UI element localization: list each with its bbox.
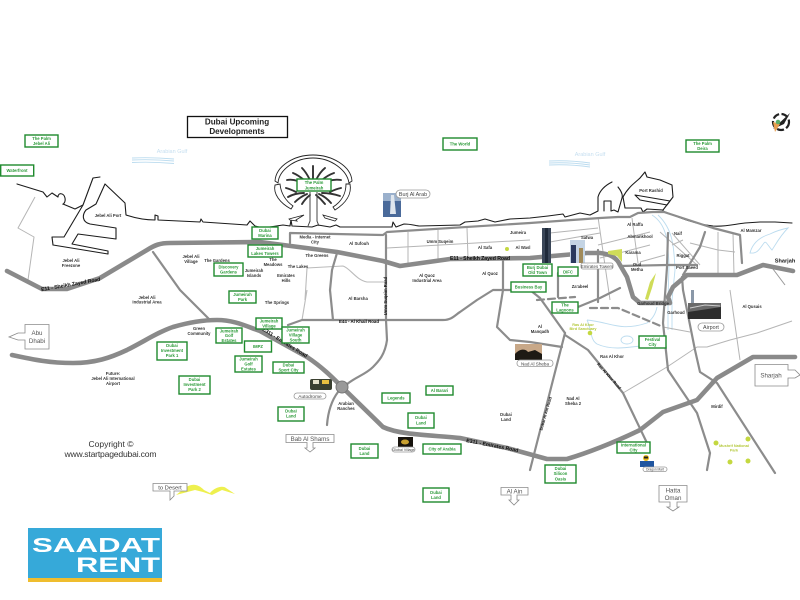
water: creek and lagoons (587, 215, 788, 348)
box: The Palm Deira: Deira (697, 146, 708, 151)
destination: Bab Al Shams: Bab Al Shams (291, 436, 329, 443)
box: Legends (382, 393, 410, 403)
area labels: Port Rashid (639, 188, 663, 193)
area labels: Industrial Area (132, 300, 162, 304)
box: Dubai Land far south: Land (431, 495, 441, 500)
Arabian Gulf water markers: Arabian Gulf (575, 152, 606, 158)
area labels: City (311, 240, 320, 244)
box: The Palm Jumeirah: Jumeirah (305, 186, 324, 190)
area labels: Garhoud (667, 310, 685, 315)
area labels: Sheba 2 (565, 401, 582, 406)
box: Dubai Investment Park 1: Park 1 (166, 353, 179, 358)
area labels (62, 188, 796, 422)
area labels: Garhoud Bridge (637, 301, 670, 306)
box: The Palm Jebel Ali (25, 135, 58, 147)
area labels: Nad Al (566, 396, 580, 401)
parks: green markers: Bird Sanctuary (569, 327, 597, 331)
box: Jumeirah Village South (282, 327, 309, 343)
box: International City: City (630, 448, 638, 452)
area labels: Riggat (676, 253, 690, 258)
area labels: Sharjah (775, 258, 796, 264)
destination: to Desert with dunes: to Desert (158, 486, 182, 492)
area labels: Hills (282, 278, 291, 283)
box: Dubai Land centre: Land (416, 420, 426, 426)
box: The Lagoons (552, 302, 578, 313)
box: Dubai Silicon Oasis: Dubai (555, 466, 566, 471)
box: Dubai Land west: Dubai (285, 408, 297, 414)
box: Dubai Investment Park 2 (179, 376, 210, 394)
box: The Lagoons: Lagoons (556, 308, 574, 312)
Arabian Gulf water markers (132, 149, 606, 167)
area labels: Jebel Ali (62, 258, 80, 263)
box: International City: International (621, 442, 646, 448)
road names: E311 - Emirates Road (261, 327, 308, 359)
area labels: Oud (633, 262, 642, 267)
box: Dubai Marina (252, 227, 278, 239)
box: Festival City (639, 336, 666, 348)
box: Jumeirah Golf Estates: Estates (222, 338, 237, 343)
area labels: The (269, 257, 277, 262)
box: Dubai Land south: Land (359, 451, 370, 456)
box: Jumeirah Golf Estates: Golf (225, 333, 234, 338)
landmark: Nad Al Sheba: Nad Al Sheba (521, 362, 549, 366)
box: City of Arabia (423, 444, 461, 454)
box: Festival City: Festival (645, 337, 660, 342)
box: Al Barari: Al Barari (431, 388, 448, 393)
area labels: Jebel Ali Port (95, 213, 122, 218)
box: Dubai Land centre (408, 413, 434, 428)
secondary roads (153, 212, 775, 473)
area labels: Community (187, 331, 211, 336)
box: Jumeirah Lakes Towers: Jumeirah (256, 246, 275, 251)
box: Jumeirah Golf Estates south (235, 356, 262, 372)
box: The Palm Deira: The Palm (693, 141, 712, 146)
box: Dubai Investment Park 1: Dubai (166, 343, 178, 348)
landmark: Burj Al Arab (383, 190, 430, 217)
box: International City (617, 442, 650, 453)
box: Jumeirah Golf Estates: Jumeirah (220, 328, 239, 334)
landmark: Burj Al Arab: Burj Al Arab (399, 192, 427, 198)
box: The Lagoons: The (561, 302, 569, 308)
box: Jumeirah Park (229, 291, 256, 303)
area labels: Metha (631, 267, 644, 272)
destination: to Desert with dunes (153, 484, 235, 500)
landmark: Dragon Mart: Dragon Mart (646, 468, 664, 472)
landmark: Burj Dubai tower (542, 228, 551, 263)
box: Jumeirah Park: Park (238, 297, 248, 302)
box: Dubai Marina: Marina (258, 233, 272, 238)
box: Dubai Investment Park 1: Investment (161, 348, 184, 353)
box: Dubai Land west: Land (286, 414, 296, 418)
area labels: Karama (625, 250, 641, 255)
box: Dubai Investment Park 2: Dubai (189, 377, 200, 382)
destination: Abu Dhabi: Abu (31, 330, 43, 337)
box: Festival City: City (649, 342, 657, 347)
box: Jumeirah Lakes Towers (248, 245, 282, 257)
box: Waterfront (1, 165, 34, 176)
box: Jumeirah Village: Jumeirah (260, 318, 279, 324)
landmark: DIFC towers and Emirates Towers (570, 240, 614, 269)
box: Dubai Investment Park 2: Park 2 (188, 387, 201, 392)
area labels: Naif (674, 231, 683, 236)
box: City of Arabia: City of Arabia (428, 446, 456, 452)
parks: green markers: Ras Al Khor (572, 323, 594, 327)
destination: Bab Al Shams (286, 434, 334, 452)
box: Dubai Land far south (423, 488, 449, 502)
destination: Abu Dhabi (9, 324, 49, 349)
road names: Ras Al Khor Road (596, 362, 623, 391)
Palm Jumeirah shape (275, 155, 352, 226)
box: Jumeirah Village South: Jumeirah (286, 328, 305, 332)
road: E11 Sheikh Zayed Road (7, 242, 793, 303)
box: Jumeirah Park: Jumeirah (233, 292, 252, 297)
landmark: Dragon Mart (640, 455, 667, 472)
destination: Sharjah: Sharjah (760, 372, 782, 380)
area labels: Jumeirah (245, 268, 264, 273)
box: Burj Dubai Old Town: Old Town (528, 270, 547, 275)
area labels: Future: (106, 371, 120, 376)
box: Dubai Sport City (273, 362, 304, 373)
box: Waterfront: Waterfront (6, 168, 28, 173)
parks: green markers (505, 247, 750, 464)
area labels: Port Saeed (676, 265, 698, 270)
area labels: Al Safa (478, 245, 493, 250)
area labels: The Springs (265, 300, 290, 305)
area labels: Industrial Area (412, 278, 442, 283)
box: Al Barari (426, 386, 453, 395)
destination: Sharjah (755, 364, 800, 386)
box: Dubai Investment Park 2: Investment (183, 382, 206, 387)
area labels: Al Barsha (348, 296, 368, 301)
box: Business Bay: Business Bay (515, 284, 543, 290)
area labels: Ras Al Khor (600, 354, 624, 359)
landmark: Global Village: Global Village (392, 448, 415, 452)
destination: Al Ain: Al Ain (507, 488, 523, 496)
box: Discovery Gardens: Discovery (218, 264, 239, 270)
box: Jumeirah Golf Estates south: Estates (241, 366, 257, 372)
top-right compass logo (773, 113, 790, 132)
box: Dubai Sport City: Sport City (278, 368, 299, 372)
road names: E44 - Al Khail Road (339, 319, 379, 324)
box: The Palm Deira (686, 140, 719, 152)
road names: E311 - Emirates Road (466, 438, 519, 454)
box: The Palm Jebel Ali: The Palm (32, 136, 51, 141)
road names (41, 256, 623, 454)
box: Business Bay (511, 282, 546, 292)
destination: Hatta Oman (659, 486, 687, 511)
box: DIFC (558, 267, 578, 276)
box: Dubai Marina: Dubai (259, 228, 271, 233)
landmark: Autodrome (294, 379, 332, 400)
area labels: The Lakes (288, 264, 309, 269)
area labels: Mirdif (711, 404, 723, 409)
area labels: Za'abeel (572, 284, 588, 289)
box: Dubai Silicon Oasis: Silicon (554, 471, 568, 476)
title box: Developments (209, 127, 265, 136)
area labels: Al Sufouh (349, 241, 369, 246)
box: Jumeirah Golf Estates south: Golf (244, 362, 253, 366)
road names: Dubai Al Ain Road (538, 396, 553, 431)
area labels: Abmankhool (627, 234, 653, 239)
box: DIFC: DIFC (563, 270, 573, 274)
area labels: Freezone (62, 263, 81, 268)
area labels: Jebel Ali (138, 295, 156, 300)
destination: Hatta Oman: Oman (665, 495, 682, 502)
area labels: The Gardens (204, 258, 230, 263)
parks: green markers: Park (730, 448, 739, 452)
box: Jumeirah Golf Estates south: Jumeirah (239, 356, 258, 362)
area labels: Meadows (264, 262, 283, 267)
area labels: The Greens (305, 253, 329, 258)
parks: green markers: Mushrif National (719, 444, 749, 448)
area labels: Al Quoz (419, 273, 435, 278)
landmark: DIFC towers and Emirates Towers: Emirates Towers (581, 264, 614, 269)
box: Dubai Land centre: Dubai (415, 415, 427, 420)
landmark: Airport (688, 290, 724, 331)
Saadat Rent logo (28, 528, 162, 582)
box: Dubai Investment Park 1 (157, 342, 187, 360)
title box: Dubai Upcoming (205, 118, 269, 126)
box: Dubai Silicon Oasis (545, 465, 576, 483)
Saadat Rent logo: SAADAT (32, 535, 160, 557)
destination: Al Ain (501, 488, 528, 505)
area labels: Land (501, 417, 511, 422)
green development boxes (1, 135, 719, 502)
box: Jumeirah Village: Village (262, 324, 276, 328)
area labels: Al Mamzar (741, 228, 762, 233)
area labels: Green (193, 326, 205, 331)
box: Legends: Legends (387, 396, 405, 400)
area labels: Arabian (338, 401, 354, 406)
box: Dubai Land west (278, 407, 304, 421)
box: Jumeirah Village South: Village (289, 332, 303, 338)
box: Dubai Land south (351, 444, 378, 458)
copyright text (64, 439, 156, 459)
box: The Palm Jebel Ali: Jebel Ali (33, 141, 50, 146)
destination: Abu Dhabi: Dhabi (29, 338, 45, 345)
area labels: Emirates (277, 273, 296, 278)
destination: Hatta Oman: Hatta (666, 488, 681, 494)
box: Dubai Sport City: Dubai (283, 362, 294, 368)
Arabian Gulf water markers: Arabian Gulf (157, 149, 188, 155)
road names: E11 - Sheikh Zayed Road (41, 277, 101, 293)
copyright text: www.startpagedubai.com (64, 449, 156, 459)
box: The World: The World (450, 142, 471, 146)
landmark: Global Village (392, 437, 415, 452)
box: Jumeirah Village (256, 318, 282, 329)
area labels: Al Qusais (742, 304, 762, 309)
area labels: Manqadh (531, 329, 550, 334)
title box (188, 116, 288, 138)
area labels: Al Raffa (627, 222, 644, 227)
area labels: Media - Internet (300, 234, 331, 240)
area labels: Al Wasl (516, 245, 530, 250)
copyright text: Copyright © (88, 439, 134, 449)
area labels: Satwa (581, 235, 594, 240)
Saadat Rent logo: RENT (76, 554, 160, 577)
landmark: Autodrome: Autodrome (298, 394, 322, 400)
area labels: Ranches (337, 406, 355, 411)
area labels: Dubai (500, 412, 512, 417)
area labels: Islands (247, 273, 262, 278)
road: E311 Emirates Road (12, 320, 795, 459)
box: Jumeirah Lakes Towers: Lakes Towers (251, 251, 279, 256)
box: Discovery Gardens (214, 263, 243, 276)
box: Dubai Land south: Dubai (359, 446, 370, 451)
coastline and Jebel Ali port (17, 172, 792, 254)
roundabout (336, 381, 348, 393)
area labels: Airport (106, 381, 121, 386)
box: Discovery Gardens: Gardens (220, 270, 238, 274)
area labels: Jebel Ali (182, 254, 200, 259)
road names: E11 - Sheikh Zayed Road (450, 256, 510, 262)
box: Burj Dubai Old Town: Burj Dubai (527, 265, 548, 270)
box: The Palm Jumeirah: The Palm (305, 180, 324, 185)
thin local roads (18, 197, 792, 393)
landmark: Airport: Airport (703, 325, 719, 331)
box: Jumeirah Golf Estates (216, 328, 242, 343)
box: IMPZ (244, 341, 272, 352)
box: Jumeirah Village South: South (290, 338, 302, 342)
area labels: Jumeira (510, 230, 527, 235)
box: IMPZ: IMPZ (253, 344, 263, 349)
area labels: Jebel Ali International (91, 376, 135, 381)
landmark: Nad Al Sheba (515, 344, 553, 366)
area labels: Umm Suqeim (427, 239, 454, 244)
box: The Palm Jumeirah (297, 179, 331, 191)
road names: Umm Suqeim Road (383, 276, 388, 315)
box: Burj Dubai Old Town (523, 264, 552, 276)
area labels: Village (184, 259, 198, 264)
box: Dubai Land far south: Dubai (430, 490, 442, 495)
area labels: Al (538, 324, 542, 329)
area labels: Al Quoz (482, 271, 498, 276)
box: Dubai Silicon Oasis: Oasis (555, 476, 567, 482)
box: The World (443, 138, 477, 150)
